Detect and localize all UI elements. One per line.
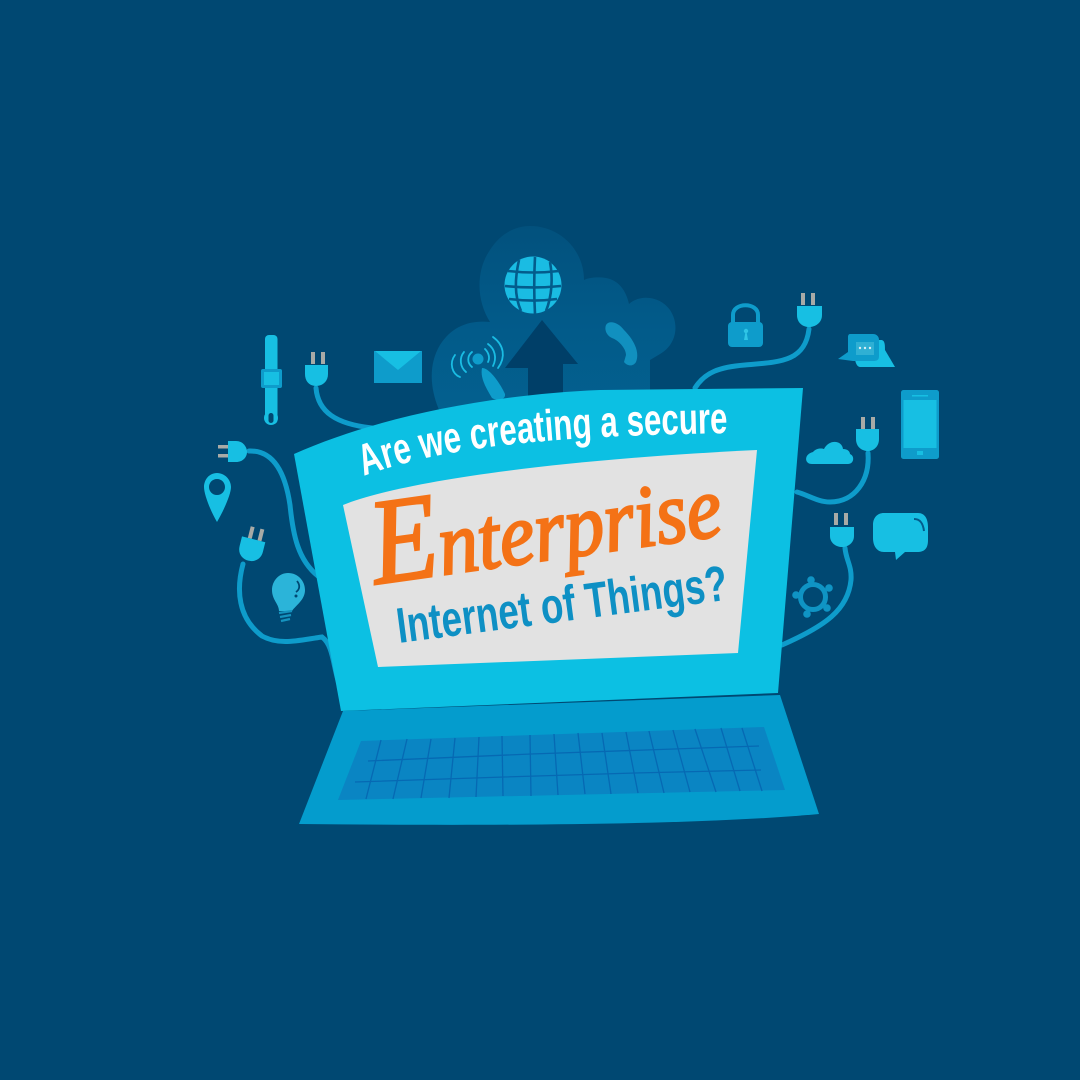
icon: smartwatch (261, 335, 282, 425)
icon: plug left with cable (218, 441, 318, 576)
icon: upload arrow (505, 320, 578, 412)
heading: enterprise: Enterprise (359, 428, 728, 611)
icon: plug top right with cable (695, 293, 822, 388)
heading: are we creating a secure: Are we creating a secure (362, 408, 726, 476)
keyboard (338, 727, 785, 800)
icon: smartphone (901, 390, 939, 459)
icon: plug top left with cable (305, 352, 372, 428)
laptop screen frame (294, 388, 803, 711)
cloud with globe, signal and phone icons (432, 226, 675, 412)
laptop base (299, 695, 819, 825)
icon: plug lower left with cable (237, 525, 339, 684)
icon: cloud (806, 442, 853, 464)
icon: light bulb (272, 573, 305, 621)
cloud shape (432, 226, 675, 412)
screen display (343, 450, 757, 667)
icon: location pin (204, 473, 231, 522)
icon: speech bubble (873, 513, 928, 560)
icon: chat bubbles (838, 334, 895, 367)
icon: telephone handset (605, 322, 637, 365)
icon: envelope (374, 351, 422, 383)
icon: padlock (728, 305, 763, 347)
icon: globe (504, 256, 562, 314)
icon: wireless signal with finger (452, 337, 505, 400)
icon: gear (792, 576, 833, 618)
heading: internet of things: Internet of Things? (393, 555, 731, 654)
icon: plug lower right with cable (782, 513, 854, 645)
laptop (294, 388, 819, 825)
icon: plug right with cable (797, 417, 879, 502)
